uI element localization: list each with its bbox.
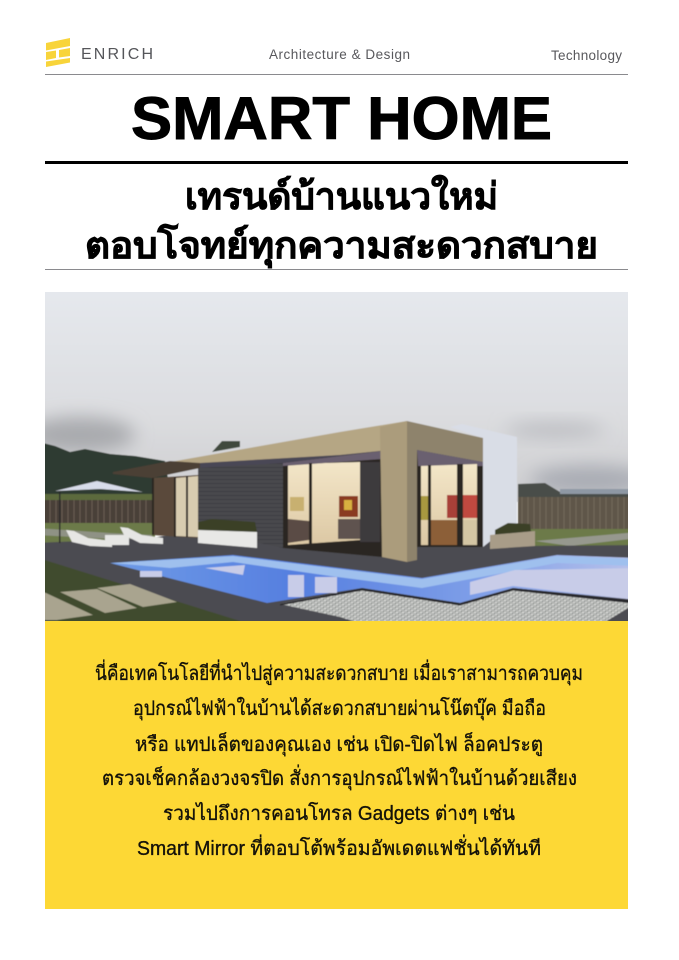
trees left [45, 442, 168, 495]
lawn and fences [45, 494, 153, 501]
panel: yellow description [45, 621, 628, 909]
header: category label: Technology [551, 48, 622, 63]
sun loungers [66, 527, 163, 547]
trees right [518, 482, 628, 498]
planter left [198, 519, 257, 532]
body line 3: หรือ แทปเล็ตของคุณเอง เช่น เปิด-ปิดไฟ ล็อคประตู [135, 731, 543, 757]
logo wordmark: ENRICH [81, 46, 153, 63]
deck [45, 535, 628, 621]
middle window [283, 451, 382, 557]
icon: yellow stacked logo mark [46, 38, 70, 67]
planter right [495, 523, 531, 535]
body line 1: นี่คือเทคโนโลยีที่นำไปสู่ความสะดวกสบาย เมื่อเราสามารถควบคุม [95, 659, 583, 686]
pool reflections [140, 565, 638, 600]
front lawn [45, 560, 240, 621]
body line 6: Smart Mirror ที่ตอบโต้พร้อมอัพเดตแฟชั่นได้ทันที [137, 834, 541, 860]
body text [95, 659, 583, 860]
subtitle line 2: ตอบโจทย์ทุกความสะดวกสบาย [85, 223, 598, 269]
header: section label: Architecture & Design [269, 47, 410, 62]
right window [417, 450, 483, 547]
pool [110, 555, 638, 603]
white box volume [450, 424, 517, 547]
gravel bed [283, 588, 628, 621]
title: SMART HOME [131, 85, 552, 152]
pillar side face [407, 421, 483, 562]
sky [35, 282, 638, 502]
stepping stones [35, 584, 177, 620]
body line 4: ตรวจเช็คกล้องวงจรปิด สั่งการอุปกรณ์ไฟฟ้าในบ้านด้วยเสียง [102, 764, 577, 791]
body line 2: อุปกรณ์ไฟฟ้าในบ้านได้สะดวกสบายผ่านโน๊ตบุ๊ค มือถือ [133, 697, 546, 721]
pillar front face [380, 421, 407, 562]
roof fascia [170, 421, 407, 463]
photo: modern house with pool [45, 292, 628, 621]
subtitle line 1: เทรนด์บ้านแนวใหม่ [185, 174, 498, 217]
roof backing [199, 450, 380, 469]
logo: Enrich [46, 38, 153, 67]
body line 5: รวมไปถึงการคอนโทรล Gadgets ต่างๆ เช่น [163, 802, 515, 825]
roof overhang [113, 461, 200, 478]
left window [152, 475, 198, 538]
pool rim light [112, 556, 638, 588]
subtitle [85, 174, 598, 269]
umbrella [55, 481, 143, 543]
brick wall [198, 463, 283, 548]
